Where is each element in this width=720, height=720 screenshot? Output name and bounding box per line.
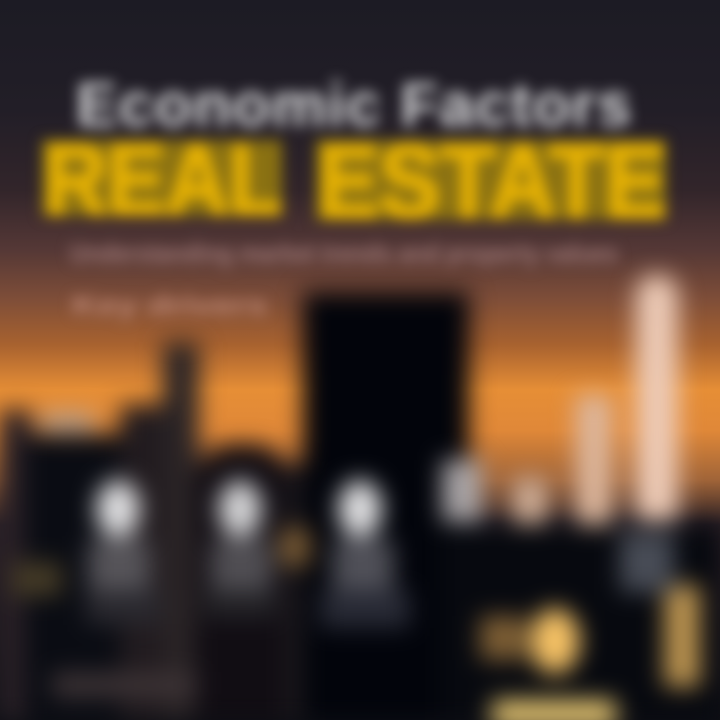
glow: blue tower right	[620, 532, 674, 592]
card glow 1 lower	[86, 590, 160, 624]
building: narrow tower	[163, 342, 199, 720]
card glow 3	[332, 540, 394, 592]
building: left edge block	[0, 410, 32, 720]
window light: amber strip	[664, 585, 700, 687]
heading word: REAL: REAL	[44, 124, 282, 236]
building: left mid block	[120, 405, 170, 720]
building: pale tower	[576, 395, 612, 525]
light: round lamp 1	[96, 480, 140, 538]
window light: olive left	[12, 562, 62, 596]
heading band right	[316, 140, 666, 220]
glow: bottom left	[52, 672, 197, 698]
building: right low skyline	[440, 525, 720, 720]
light: round lamp 2	[218, 480, 262, 538]
card glow 3 lower	[320, 590, 410, 628]
window light: gold	[530, 608, 580, 674]
building: left block	[25, 435, 125, 720]
building: connecting low block	[285, 465, 315, 720]
building: central black tower	[303, 292, 469, 720]
window light: low glow	[480, 616, 526, 660]
card glow 2	[210, 540, 272, 592]
light: round lamp 3	[338, 480, 382, 538]
subtitle line 1: Understanding market trends and property values	[70, 238, 618, 268]
pale light: gray blob	[442, 460, 482, 522]
window light: bottom	[492, 700, 616, 720]
pale light: tan blob	[513, 478, 547, 524]
building: pale spire	[636, 275, 678, 520]
window light: brown near dome	[280, 528, 310, 566]
heading word: ESTATE: ESTATE	[318, 124, 666, 240]
glow on rooftop	[42, 414, 94, 430]
building: mid dome	[195, 445, 290, 720]
heading band left	[42, 140, 282, 216]
title line: Economic Factors: Economic Factors	[76, 71, 633, 140]
subtitle line 2: Key drivers	[72, 290, 267, 320]
card glow 1	[88, 540, 150, 592]
card glow 2 lower	[203, 590, 277, 618]
